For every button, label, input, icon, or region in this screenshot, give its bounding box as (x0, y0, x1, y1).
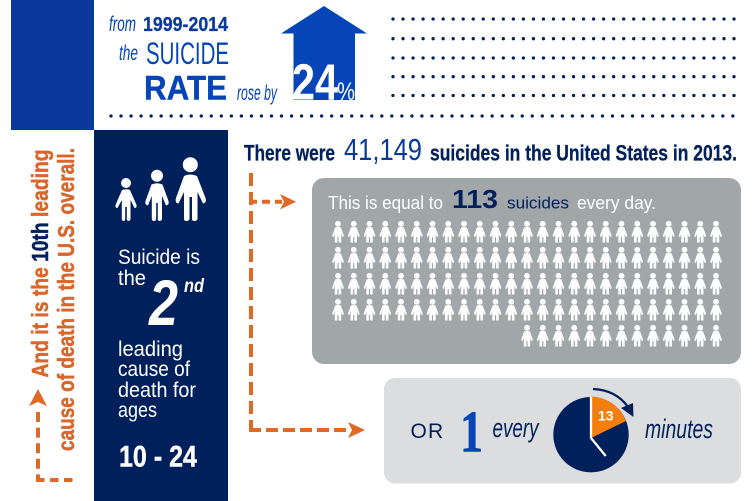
text: Suicide is the (118, 246, 200, 290)
text: leading cause of death for ages: ages (118, 399, 157, 422)
heading: from 1999-2014 the suicide rate rose by: RATE (144, 70, 227, 108)
heading: from 1999-2014 the suicide rate rose by: 1999-2014 (143, 13, 229, 36)
text: this is equal to 113 suicides every day: This is equal to (328, 193, 443, 213)
arrow: dashed right branches (249, 173, 365, 438)
icon: three figures (115, 157, 206, 221)
icon: up arrow with 24%: 24 (292, 54, 339, 110)
navy panel: 2nd leading cause (94, 130, 228, 501)
text: 2nd: nd (184, 276, 204, 297)
heading: from 1999-2014 the suicide rate rose by: from (109, 13, 136, 36)
chart: clock pie (553, 389, 634, 472)
heading: from 1999-2014 the suicide rate rose by: the (119, 42, 138, 65)
rotated text: 10th leading cause: cause of death in the U.S. overall. (53, 148, 79, 451)
text: leading cause of death for ages: death for (118, 379, 196, 402)
icon: up arrow with 24%: % (337, 78, 355, 106)
arrow: dashed left (29, 389, 74, 480)
heading: from 1999-2014 the suicide rate rose by: SUICIDE (146, 35, 229, 71)
rotated text: 10th leading cause (27, 148, 79, 451)
text: leading cause of death for ages (118, 338, 196, 422)
text: leading cause of death for ages: leading (118, 338, 183, 361)
heading: there were 41,149 suicides (244, 132, 737, 167)
text: minutes: minutes (645, 414, 713, 444)
text: this is equal to 113 suicides every day: suicides (507, 194, 569, 212)
text: leading cause of death for ages: cause of (118, 358, 190, 381)
dot rows (111, 19, 740, 116)
text: Suicide is the: Suicide is (118, 246, 200, 269)
text: 2nd: 2 (148, 267, 178, 339)
heading: from 1999-2014 the suicide rate rose by (109, 13, 278, 108)
heading: from 1999-2014 the suicide rate rose by: rose by (237, 82, 278, 105)
icon: up arrow with 24% (281, 6, 367, 110)
text: this is equal to 113 suicides every day: 113 (452, 184, 498, 214)
text: 2nd (148, 267, 204, 339)
text: this is equal to 113 suicides every day: every day. (577, 193, 656, 213)
text: 1: 1 (460, 398, 483, 464)
icon grid: 113 people (332, 221, 722, 346)
text: this is equal to 113 suicides every day (328, 184, 656, 214)
text: OR: OR (410, 420, 443, 443)
heading: there were 41,149 suicides: 41,149 (344, 132, 422, 167)
text: every: every (492, 413, 540, 443)
panel: 113 suicides every day (312, 178, 741, 364)
heading: there were 41,149 suicides: There were (244, 140, 335, 166)
text: 10 - 24: 10 - 24 (119, 440, 197, 474)
rotated text: 10th leading cause: And it is the 10th leading (27, 150, 53, 378)
chart: clock pie: 13 (598, 408, 614, 424)
blue square (11, 0, 94, 130)
text: Suicide is the: the (118, 267, 146, 290)
panel: 1 every 13 minutes (384, 378, 741, 484)
